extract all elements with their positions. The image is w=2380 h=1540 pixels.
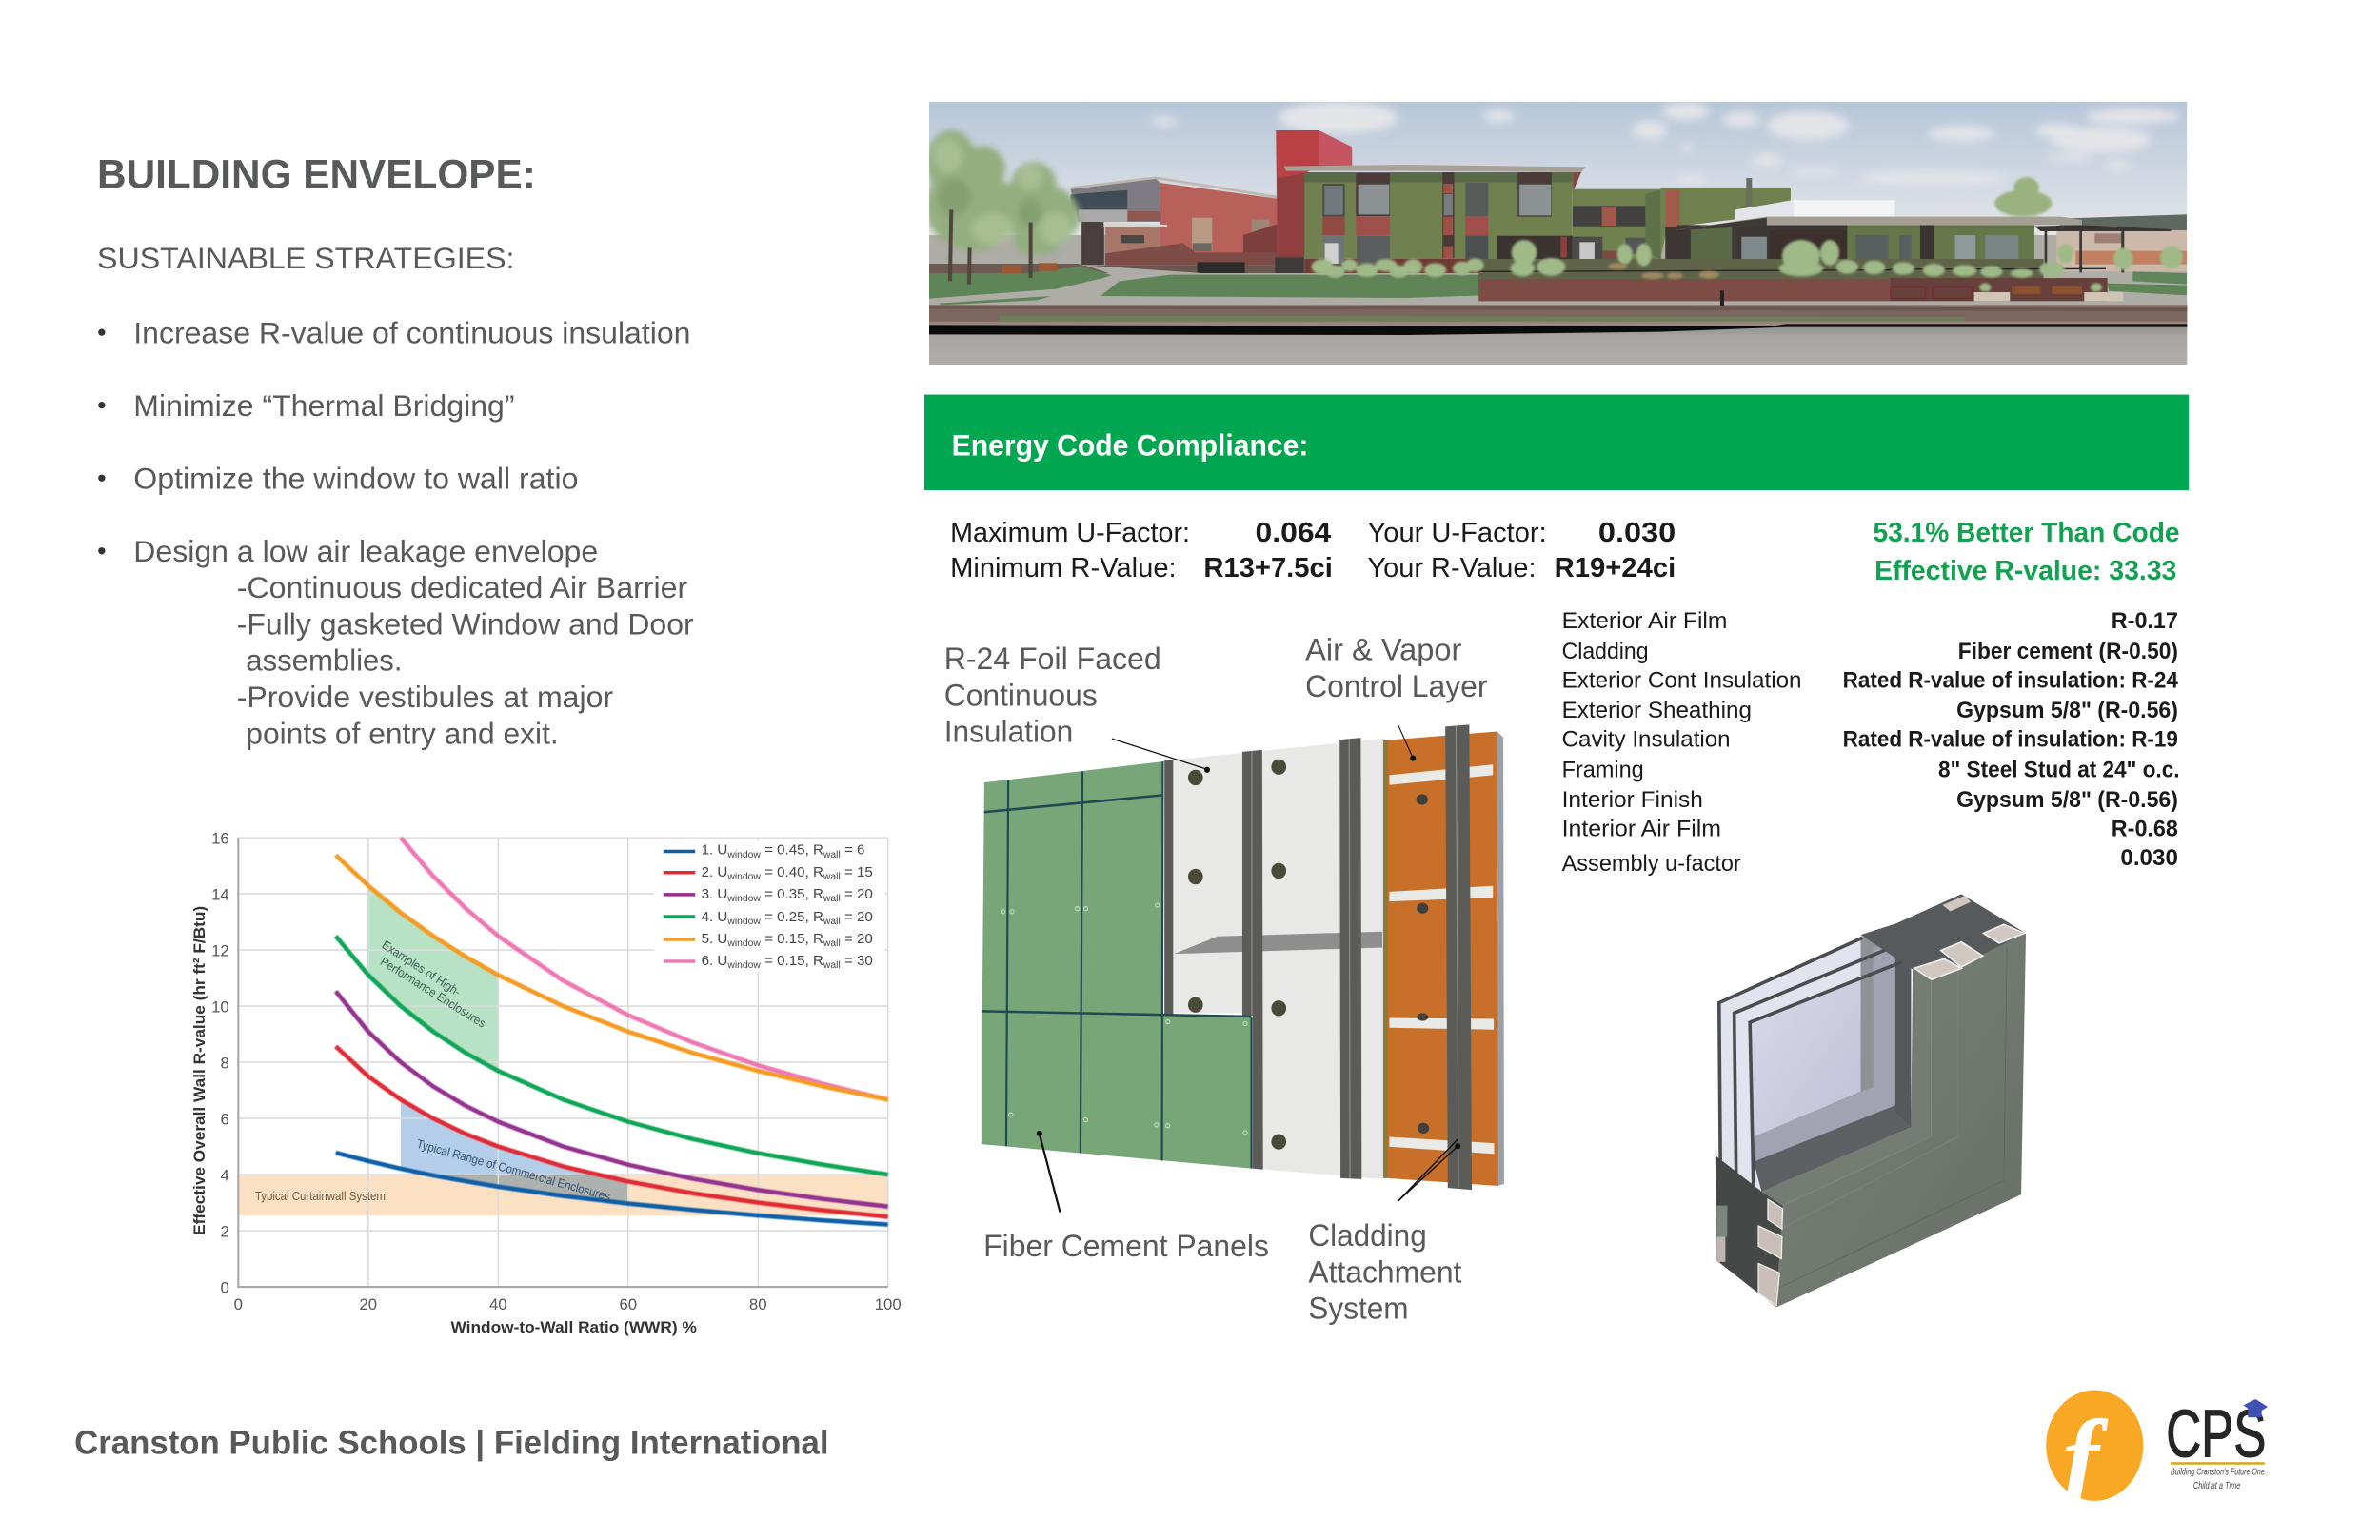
chart legend: 5. U — [702, 931, 727, 947]
chart axis tick labels: 4 — [220, 1166, 229, 1184]
chart: effective wall R-value vs window-to-wall ratio — [190, 829, 902, 1336]
table: wall assembly layers: 0.030 — [2120, 845, 2178, 871]
chart legend: 4. U — [702, 909, 727, 925]
table: wall assembly layers: 8" Steel Stud at 24" o.c. — [1938, 757, 2180, 782]
building: rear wings — [1573, 178, 1894, 260]
wall labels: Continuous — [944, 677, 1098, 712]
bullet list: strategies: Optimize the window to wall ratio — [133, 461, 578, 495]
chart legend: = 6 — [841, 842, 864, 859]
subheading: sustainable strategies: SUSTAINABLE STRATEGIES: — [97, 241, 514, 275]
wall labels: Air & Vapor — [1305, 632, 1462, 667]
chart axis tick labels: 40 — [489, 1295, 507, 1313]
icon: graduation cap — [2244, 1399, 2268, 1417]
chart legend: = 20 — [841, 909, 873, 925]
chart legend: 3. U — [702, 886, 727, 902]
chart axis tick labels: 100 — [875, 1295, 902, 1313]
chart legend: = 0.45, R — [761, 842, 823, 859]
chart zone labels: Typical Curtainwall System — [255, 1189, 386, 1203]
chart legend: window — [726, 960, 761, 971]
building: tower — [1275, 130, 1352, 273]
chart legend: = 0.35, R — [761, 886, 823, 902]
wall labels: Insulation — [944, 714, 1073, 749]
table: wall assembly layers: Rated R-value of insulation: R-24 — [1843, 667, 2179, 693]
attachment rails — [1164, 724, 1472, 1190]
banner: energy code compliance — [924, 395, 2189, 490]
chart legend: wall — [823, 917, 841, 927]
chart legend: wall — [823, 850, 841, 860]
wall labels — [944, 632, 1488, 1326]
compliance summary values: Minimum R-Value: — [950, 553, 1177, 583]
fiber cement panels — [982, 761, 1252, 1169]
building: left gym wing — [1070, 176, 1278, 273]
logo: Cranston Public Schools: Building Cranston's Future One — [2171, 1468, 2265, 1478]
chart legend: window — [726, 872, 761, 882]
continuous insulation — [1165, 739, 1383, 1179]
building: central green block — [1284, 165, 1585, 273]
highlight: better than code — [1873, 518, 2180, 586]
trees and shrubs — [926, 130, 1080, 256]
chart legend: 6. U — [702, 953, 727, 969]
ground and road — [929, 259, 2187, 365]
hero image: building rendering — [926, 102, 2187, 365]
table: wall assembly layers: Exterior Sheathing — [1562, 698, 1752, 723]
table: wall assembly layers: Exterior Cont Insulation — [1562, 667, 1802, 693]
chart legend: window — [726, 917, 761, 927]
chart legend: = 20 — [841, 886, 873, 902]
table: wall assembly layers: Rated R-value of insulation: R-19 — [1843, 726, 2178, 752]
table: wall assembly layers: Exterior Air Film — [1562, 608, 1727, 634]
table: wall assembly layers: Interior Air Film — [1562, 817, 1721, 842]
table: wall assembly layers — [1562, 608, 2180, 877]
compliance summary values: Your R-Value: — [1368, 553, 1537, 583]
highlight: better than code: Effective R-value: 33.33 — [1874, 556, 2176, 586]
table: wall assembly layers: Interior Finish — [1562, 787, 1703, 813]
wall labels: R-24 Foil Faced — [944, 641, 1161, 676]
compliance summary values: Your U-Factor: — [1368, 518, 1547, 548]
distant town — [1994, 177, 2187, 271]
bullet list: strategies: Increase R-value of continuous insulation — [133, 315, 690, 349]
bullet list: strategies — [98, 315, 694, 750]
chart axis tick labels: 0 — [234, 1295, 243, 1313]
bullet list: strategies: points of entry and exit. — [246, 716, 559, 750]
chart axis tick labels: 2 — [220, 1222, 229, 1240]
bullet list: strategies: -Provide vestibules at major — [237, 680, 614, 714]
chart axis tick labels: 60 — [619, 1295, 637, 1313]
clouds — [1150, 102, 2180, 185]
table: wall assembly layers: Fiber cement (R-0.50) — [1958, 639, 2178, 664]
compliance summary values: 0.030 — [1598, 518, 1676, 548]
chart zone labels: Performance Enclosures — [378, 954, 488, 1031]
footer credit: Cranston Public Schools | Fielding International — [74, 1424, 829, 1461]
chart shaded zones — [238, 885, 888, 1215]
compliance summary values: R19+24ci — [1555, 553, 1676, 583]
diagram: wall assembly — [982, 724, 1504, 1213]
chart legend: window — [726, 850, 761, 860]
chart legend: wall — [823, 960, 841, 971]
chart legend: window — [726, 894, 761, 904]
leader lines — [1037, 725, 1460, 1213]
chart axis titles — [190, 906, 697, 1336]
chart axis tick labels: 6 — [220, 1110, 229, 1128]
chart axis tick labels: 8 — [220, 1054, 229, 1072]
table: wall assembly layers: Gypsum 5/8" (R-0.56) — [1956, 698, 2178, 723]
chart axis tick labels: 20 — [359, 1295, 377, 1313]
chart legend: = 15 — [841, 864, 873, 880]
frame section: top — [1861, 894, 2026, 980]
title: BUILDING ENVELOPE: — [97, 152, 536, 198]
chart axis tick labels — [211, 829, 902, 1313]
wall labels: Attachment — [1308, 1254, 1461, 1289]
chart legend: = 30 — [841, 953, 873, 969]
chart legend — [654, 840, 885, 971]
chart zone labels: Typical Range of Commercial Enclosures — [415, 1136, 612, 1203]
chart axis tick labels: 80 — [749, 1295, 767, 1313]
table: wall assembly layers: Framing — [1562, 757, 1644, 782]
table: wall assembly layers: R-0.68 — [2112, 817, 2178, 842]
brick garden wall and furnishings — [1478, 268, 2187, 306]
table: wall assembly layers: Assembly u-factor — [1562, 851, 1741, 877]
logo: Cranston Public Schools — [2166, 1396, 2268, 1491]
chart legend: wall — [823, 938, 841, 949]
wall labels: Control Layer — [1305, 668, 1488, 703]
highlight: better than code: 53.1% Better Than Code — [1873, 518, 2180, 548]
chart axis tick labels: 12 — [211, 941, 229, 959]
compliance summary values: 0.064 — [1256, 518, 1331, 548]
table: wall assembly layers: Cavity Insulation — [1562, 726, 1731, 752]
table: wall assembly layers: Gypsum 5/8" (R-0.56) — [1956, 787, 2178, 813]
chart axis tick labels: 0 — [220, 1278, 229, 1296]
chart axis tick labels: 10 — [211, 997, 229, 1016]
building: pavilion — [1676, 217, 2171, 272]
frame section: bottom — [1716, 1155, 1783, 1308]
chart axis tick labels: 14 — [211, 885, 229, 903]
chart legend: 1. U — [702, 842, 727, 859]
banner: energy code compliance: Energy Code Compliance: — [952, 427, 1308, 462]
chart zone labels: Examples of High- — [380, 938, 464, 999]
logo: Cranston Public Schools: CPS — [2166, 1396, 2266, 1471]
table: wall assembly layers: R-0.17 — [2112, 608, 2178, 634]
chart legend: wall — [823, 872, 841, 882]
chart legend: = 0.40, R — [761, 864, 823, 880]
diagram: window frame section — [1716, 894, 2026, 1308]
chart legend: 2. U — [702, 864, 727, 880]
logo: Fielding International — [2046, 1390, 2144, 1501]
chart legend: = 20 — [841, 931, 873, 947]
chart axis tick labels: 16 — [211, 829, 229, 847]
chart curves — [336, 838, 888, 1225]
table: wall assembly layers: Cladding — [1562, 639, 1649, 664]
bullet list: strategies: Design a low air leakage envelope — [133, 534, 598, 568]
compliance summary values: R13+7.5ci — [1203, 553, 1333, 583]
bullet list: strategies: assemblies. — [246, 643, 403, 678]
chart legend: window — [726, 938, 761, 949]
compliance summary values: Maximum U-Factor: — [950, 518, 1190, 548]
chart zone labels — [255, 938, 612, 1203]
chart legend: = 0.25, R — [761, 909, 823, 925]
wall labels: Fiber Cement Panels — [983, 1228, 1269, 1263]
wall labels: Cladding — [1308, 1217, 1427, 1253]
air and vapor layer — [1382, 732, 1504, 1186]
wall labels: System — [1308, 1291, 1409, 1326]
chart legend: wall — [823, 894, 841, 904]
chart legend: = 0.15, R — [761, 931, 823, 947]
compliance summary values — [950, 518, 1676, 583]
chart legend: = 0.15, R — [761, 953, 823, 969]
chart axis titles: Window-to-Wall Ratio (WWR) % — [451, 1318, 697, 1336]
chart axis titles: Effective Overall Wall R-value (hr ft² F/Btu) — [190, 906, 208, 1235]
bullet list: strategies: -Fully gasketed Window and Door — [237, 606, 694, 641]
bullet list: strategies: Minimize “Thermal Bridging” — [133, 388, 514, 423]
bullet list: strategies: -Continuous dedicated Air Barrier — [237, 570, 688, 604]
logo: Cranston Public Schools: Child at a Time — [2193, 1481, 2241, 1491]
logo: Fielding International: f — [2063, 1397, 2109, 1518]
